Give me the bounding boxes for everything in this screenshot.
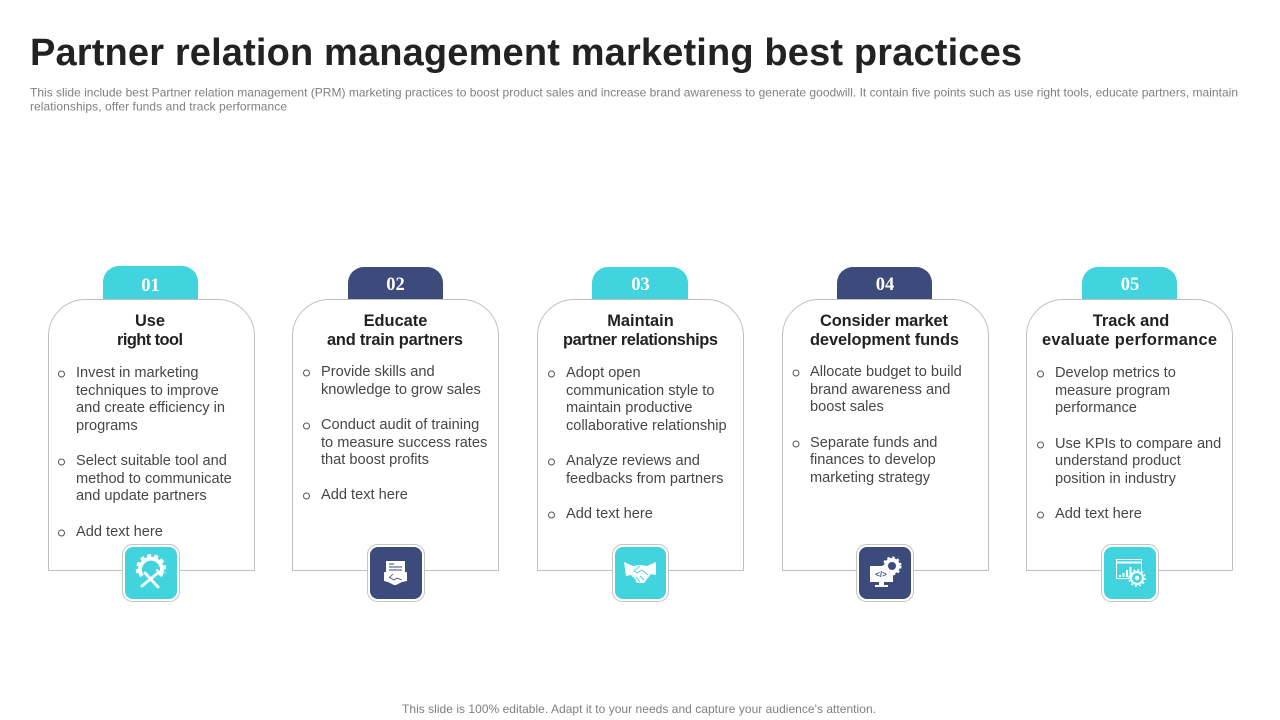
bullet list: Add text here bbox=[321, 487, 408, 503]
number tab 02 bbox=[348, 267, 443, 300]
heading bbox=[1042, 312, 1217, 349]
card outline bbox=[538, 300, 744, 570]
icon: monitor with code and gear bbox=[856, 544, 914, 602]
bullet list: feedbacks from partners bbox=[566, 471, 723, 487]
card outline bbox=[782, 300, 988, 570]
bullet list: Allocate budget to build bbox=[810, 364, 962, 380]
bullet list: Invest in marketing bbox=[76, 365, 198, 381]
bullet list bbox=[304, 364, 487, 503]
panel: maintain partner relationships bbox=[538, 267, 744, 602]
number tab 04: 04 bbox=[876, 275, 894, 295]
number tab 03: 03 bbox=[631, 275, 650, 295]
bullet list: Analyze reviews and bbox=[566, 453, 700, 469]
heading bbox=[117, 312, 183, 349]
heading: partner relationships bbox=[563, 331, 718, 349]
heading: development funds bbox=[810, 331, 959, 349]
heading bbox=[563, 312, 718, 349]
number tab 04 bbox=[837, 267, 932, 300]
heading: Use bbox=[135, 312, 165, 330]
icon: monitor with code and gear: </> bbox=[875, 570, 887, 579]
icon: contract handshake bbox=[368, 544, 424, 602]
bullet list: performance bbox=[1055, 400, 1137, 416]
bullet list: programs bbox=[76, 418, 138, 434]
bullet list: techniques to improve bbox=[76, 383, 219, 399]
card outline bbox=[292, 300, 498, 570]
bullet list: understand product bbox=[1055, 453, 1181, 469]
bullet list: Select suitable tool and bbox=[76, 453, 227, 469]
icon: handshake bbox=[612, 544, 668, 602]
bullet list: boost sales bbox=[810, 399, 884, 415]
description: This slide include best Partner relation management (PRM) marketing practices to boost product sales and increase brand awareness to generate goodwill. It contain five points such as use right tools, educate partners, maintain bbox=[30, 86, 1238, 100]
bullet list: position in industry bbox=[1055, 471, 1177, 487]
heading: evaluate performance bbox=[1042, 331, 1217, 349]
icon: analytics window with gear bbox=[1102, 544, 1158, 602]
bullet list: knowledge to grow sales bbox=[321, 382, 481, 398]
number tab 03 bbox=[592, 267, 688, 300]
card outline bbox=[48, 300, 254, 570]
card outline bbox=[1026, 300, 1232, 570]
bullet list: measure program bbox=[1055, 383, 1170, 399]
number tab 02: 02 bbox=[386, 275, 405, 295]
bullet list: that boost profits bbox=[321, 452, 429, 468]
bullet list: Conduct audit of training bbox=[321, 417, 479, 433]
panel: educate and train partners bbox=[292, 267, 498, 602]
number tab 05: 05 bbox=[1121, 275, 1139, 295]
heading: and train partners bbox=[327, 331, 463, 349]
bullet list: Add text here bbox=[1055, 506, 1142, 522]
bullet list: brand awareness and bbox=[810, 382, 950, 398]
heading: Maintain bbox=[607, 312, 674, 330]
bullet list: method to communicate bbox=[76, 471, 232, 487]
number tab 05 bbox=[1082, 267, 1177, 300]
heading: Educate bbox=[364, 312, 427, 330]
bullet list: and create efficiency in bbox=[76, 400, 225, 416]
bullet list: and update partners bbox=[76, 488, 207, 504]
panel: consider market development funds bbox=[782, 267, 988, 602]
bullet list: Adopt open bbox=[566, 365, 641, 381]
bullet list: collaborative relationship bbox=[566, 418, 727, 434]
panel: use right tool bbox=[48, 266, 254, 602]
bullet list: Develop metrics to bbox=[1055, 365, 1176, 381]
heading: Track and bbox=[1093, 312, 1169, 330]
heading bbox=[810, 312, 959, 349]
bullet list bbox=[1038, 365, 1221, 522]
bullet list: communication style to bbox=[566, 383, 714, 399]
heading: Consider market bbox=[820, 312, 949, 330]
bullet list: finances to develop bbox=[810, 452, 936, 468]
bullet list: Add text here bbox=[76, 524, 163, 540]
bullet list: Use KPIs to compare and bbox=[1055, 436, 1221, 452]
bullet list: Provide skills and bbox=[321, 364, 435, 380]
bullet list bbox=[58, 365, 232, 540]
bullet list: marketing strategy bbox=[810, 470, 931, 486]
number tab 01: 01 bbox=[141, 276, 160, 296]
panel: track and evaluate performance bbox=[1026, 267, 1232, 602]
bullet list bbox=[793, 364, 962, 486]
footer note: This slide is 100% editable. Adapt it to your needs and capture your audience's attention. bbox=[402, 702, 876, 716]
bullet list: Add text here bbox=[566, 506, 653, 522]
title: Partner relation management marketing best practices bbox=[30, 32, 1022, 74]
bullet list: maintain productive bbox=[566, 400, 693, 416]
description bbox=[30, 86, 1238, 114]
heading: right tool bbox=[117, 331, 183, 349]
bullet list: to measure success rates bbox=[321, 435, 487, 451]
icon: gear and tools bbox=[122, 544, 180, 602]
heading bbox=[327, 312, 463, 349]
bullet list: Separate funds and bbox=[810, 435, 937, 451]
bullet list bbox=[548, 365, 727, 522]
description: relationships, offer funds and track performance bbox=[30, 100, 287, 114]
number tab 01 bbox=[103, 266, 198, 300]
